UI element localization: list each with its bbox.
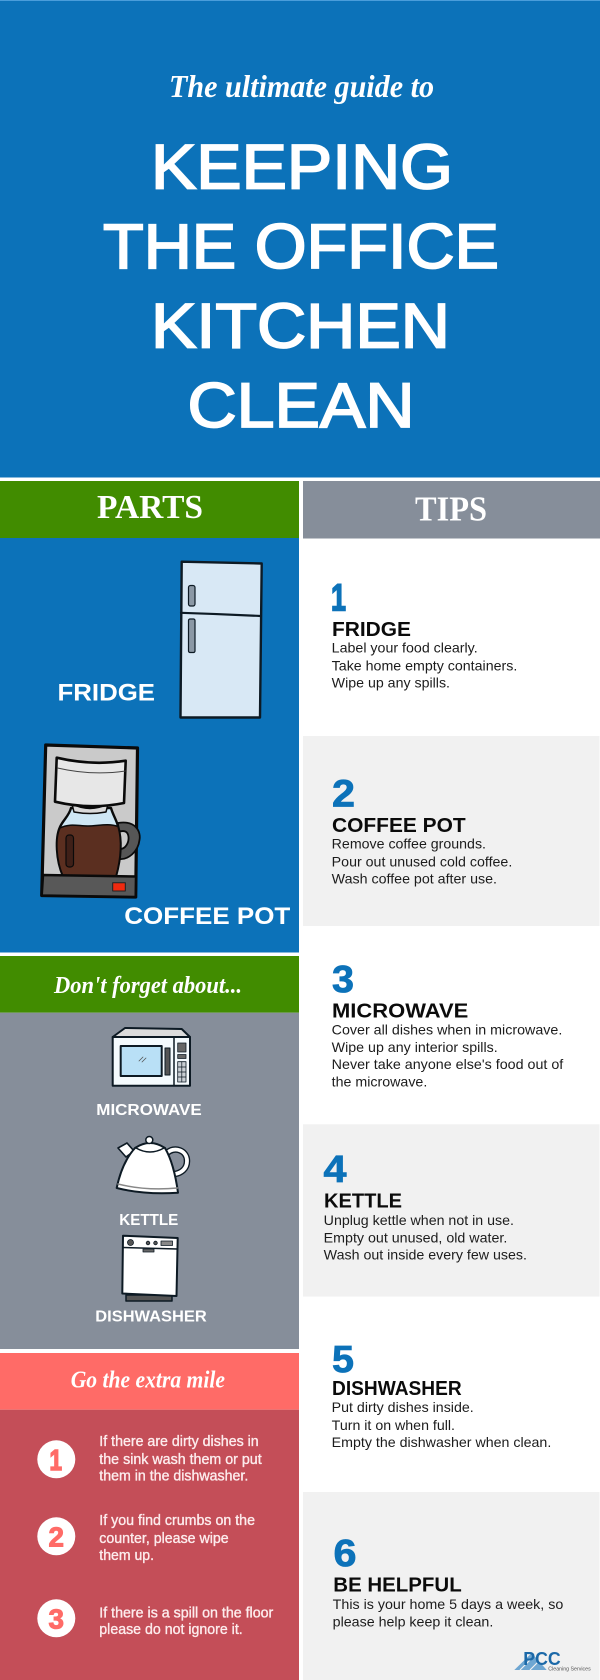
tip text: Wash out inside every few uses. [324,1247,527,1263]
tip text: Never take anyone else's food out of [332,1056,563,1072]
number 5: 5 [332,1339,354,1381]
title: KITCHEN [151,292,450,362]
panel: tip 4 kettle [303,1124,600,1297]
title: THE OFFICE [103,212,499,282]
item 1: them in the dishwasher. [99,1469,248,1485]
icon: coffee pot [42,745,140,897]
panel: go the extra mile [0,1410,299,1680]
item 3 [37,1599,273,1638]
tip text: This is your home 5 days a week, so [333,1596,564,1612]
tip text: Wash coffee pot after use. [332,871,497,887]
tip heading: KETTLE [324,1189,402,1212]
item 1: If there are dirty dishes in [99,1434,259,1450]
title: KEEPING [151,132,453,202]
panel: tip 5 dishwasher [303,1297,600,1492]
tip text: Put dirty dishes inside. [332,1399,474,1415]
number 1: 1 [331,578,346,620]
label: coffee pot: COFFEE POT [124,903,291,930]
item 2: 2 [48,1521,64,1552]
tip text: please help keep it clean. [333,1614,493,1630]
panel: title header [0,0,600,478]
tip text: Remove coffee grounds. [332,836,486,852]
item 2: counter, please wipe [99,1531,229,1547]
item 1: the sink wash them or put [99,1452,262,1468]
tip heading: FRIDGE [332,618,411,641]
tip text: Empty out unused, old water. [324,1230,507,1246]
icon: kettle [117,1136,187,1193]
label: fridge: FRIDGE [58,680,155,706]
logo: PCC Cleaning Services [514,1649,591,1673]
tip heading: BE HELPFUL [333,1574,462,1597]
logo: PCC Cleaning Services: PCC [523,1649,561,1669]
number 3: 3 [332,959,354,1001]
tip text: Empty the dishwasher when clean. [332,1434,551,1450]
number 6: 6 [334,1533,356,1575]
tip text: Unplug kettle when not in use. [324,1212,514,1228]
item 2: If you find crumbs on the [99,1513,255,1529]
tip text [333,1596,564,1630]
heading: parts [0,481,299,538]
label: kettle: KETTLE [119,1212,179,1229]
tip text [332,1399,551,1450]
tip heading: MICROWAVE [332,999,468,1022]
tip text: Wipe up any interior spills. [332,1039,498,1055]
item 3: 3 [48,1603,64,1634]
tip text [324,1212,527,1263]
item 1 [37,1434,262,1485]
icon: fridge [180,562,262,718]
title [103,132,499,441]
heading: go the extra mile [0,1353,299,1410]
heading: tips: TIPS [415,490,487,528]
tip text: Take home empty containers. [332,658,517,674]
label: microwave: MICROWAVE [96,1102,202,1119]
tip text: Label your food clearly. [332,640,478,656]
panel: parts [0,538,299,952]
number 4: 4 [324,1149,346,1191]
panel: tip 2 coffee pot [303,736,600,926]
tip text: Wipe up any spills. [332,675,450,691]
tip text: Turn it on when full. [332,1417,455,1433]
number 2: 2 [332,774,355,816]
tip heading: COFFEE POT [332,814,466,837]
heading: parts: PARTS [97,489,203,526]
logo: PCC Cleaning Services: Cleaning Services [548,1667,591,1673]
icon: dishwasher [122,1236,178,1301]
subtitle: The ultimate guide to [169,68,434,104]
tip text [332,836,512,887]
item 3: please do not ignore it. [99,1622,243,1638]
tip text: the microwave. [332,1074,427,1090]
label: dishwasher: DISHWASHER [95,1308,207,1325]
panel: tip 3 microwave [303,926,600,1124]
icon: microwave [113,1028,190,1086]
panel: don't forget about [0,1013,299,1349]
heading: tips [303,481,600,538]
tip text: Cover all dishes when in microwave. [332,1022,562,1038]
title: CLEAN [188,371,414,441]
panel: tip 6 be helpful [303,1492,600,1680]
heading: don't forget about: Don't forget about... [53,973,242,999]
item 2 [37,1513,255,1564]
tip text [332,1022,563,1090]
tip heading: DISHWASHER [332,1377,462,1400]
heading: don't forget about [0,956,299,1013]
panel: tip 1 fridge [303,538,600,736]
heading: go the extra mile: Go the extra mile [71,1368,225,1394]
item 2: them up. [99,1548,154,1564]
tip text [332,640,517,691]
item 3: If there is a spill on the floor [99,1605,273,1621]
tip text: Pour out unused cold coffee. [332,854,512,870]
item 1: 1 [50,1445,62,1477]
